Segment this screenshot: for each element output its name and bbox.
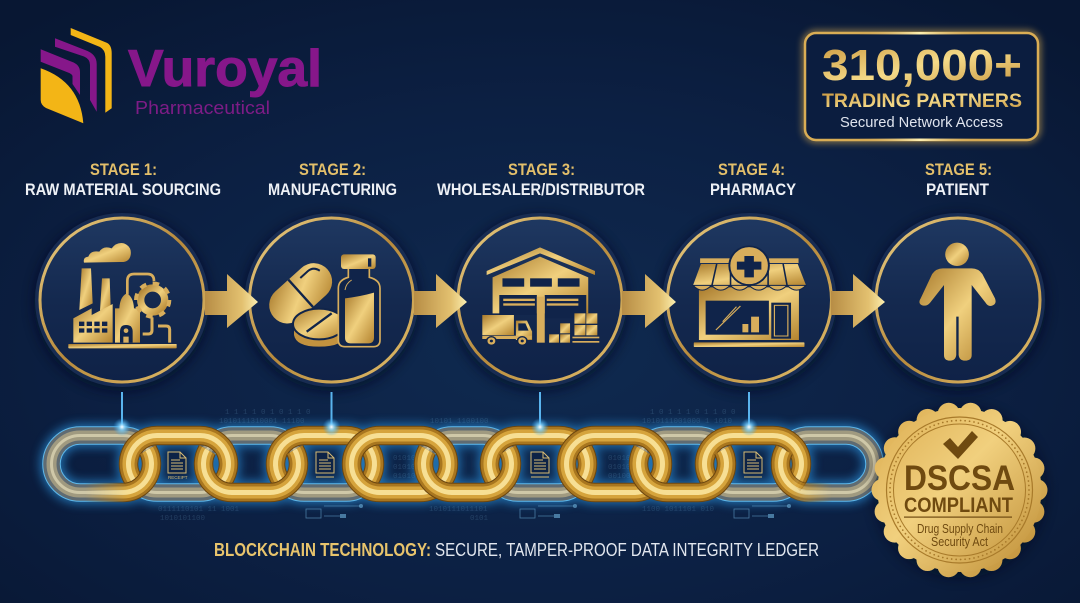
badge text: act name: Drug Supply Chain xyxy=(917,521,1003,536)
arrow: stage 4 to 5 xyxy=(831,274,885,328)
gold links: upper arcs xyxy=(129,436,801,492)
heading: stage 2: MANUFACTURING xyxy=(268,180,397,199)
heading: stage 3: WHOLESALER/DISTRIBUTOR xyxy=(437,180,645,199)
callout: 310,000+ trading partners xyxy=(805,32,1038,141)
arrow: stage 1 to 2 xyxy=(205,274,258,328)
stage 3 circle: warehouse xyxy=(452,213,628,391)
heading: stage 5: PATIENT xyxy=(926,180,990,199)
chain glow xyxy=(52,436,874,492)
document icons: RECEIPT xyxy=(168,475,188,480)
binary data texture: 10101 1100100 xyxy=(430,418,489,426)
binary data texture: 1010111310001 11100 xyxy=(219,418,305,426)
gold fade: last link xyxy=(781,450,832,492)
caption: blockchain technology: BLOCKCHAIN TECHNOLOGY: xyxy=(214,540,431,560)
binary data texture: 010100 xyxy=(608,464,636,472)
icon: logo mark xyxy=(41,28,112,123)
heading: stage 1: STAGE 1: xyxy=(90,160,157,179)
big number: 310,000+ xyxy=(822,41,1022,90)
logo wordmark: Vuroyal xyxy=(128,40,322,98)
icon: person xyxy=(919,243,996,361)
connectors: stage to chain xyxy=(122,392,749,428)
badge: DSCSA compliant seal xyxy=(874,406,1046,578)
gold fade: first link xyxy=(85,450,151,492)
heading: stage 2 xyxy=(268,160,397,199)
heading: stage 4 xyxy=(710,160,797,199)
badge: DSCSA compliant seal: Security Act xyxy=(931,534,988,549)
heading: stage 1 xyxy=(25,160,221,199)
heading: stage 2: STAGE 2: xyxy=(299,160,366,179)
icon: warehouse and truck xyxy=(482,247,599,346)
stage 4 circle: pharmacy xyxy=(662,213,838,391)
binary data texture: 1010111011101 xyxy=(429,506,488,514)
binary data texture: 010100 xyxy=(393,455,421,463)
heading: stage 4: STAGE 4: xyxy=(718,160,785,179)
caption: blockchain technology xyxy=(214,540,819,560)
data key icons xyxy=(306,504,791,518)
stage 5 circle: patient xyxy=(870,213,1046,391)
connector sparks xyxy=(113,418,758,436)
document icons xyxy=(168,452,762,480)
icon: check mark xyxy=(943,431,978,459)
binary data texture xyxy=(158,409,736,523)
binary data texture: 0101 xyxy=(470,515,489,523)
callout subtext: Secured Network Access xyxy=(840,114,1003,131)
binary data texture: 010100 xyxy=(608,455,636,463)
caption: blockchain technology: SECURE, TAMPER-PROOF DATA INTEGRITY LEDGER xyxy=(435,540,819,560)
badge subtitle: COMPLIANT xyxy=(904,494,1013,517)
silver links xyxy=(52,436,874,492)
logo subtitle: Pharmaceutical xyxy=(135,98,270,118)
binary data texture: 010100 xyxy=(393,473,421,481)
binary data texture: 1010111001000 1 1010 xyxy=(642,418,733,426)
binary data texture: 001001 xyxy=(608,473,636,481)
icon: pharmacy shop xyxy=(693,246,806,347)
heading: stage 5 xyxy=(925,160,992,199)
binary data texture: 010100 xyxy=(393,464,421,472)
logo: Vuroyal Pharmaceutical xyxy=(41,28,322,123)
binary data texture: 0111110101 11 1001 xyxy=(158,506,240,514)
stage 1 circle: factory xyxy=(34,213,210,391)
heading: stage 3 xyxy=(437,160,645,199)
blockchain chain xyxy=(52,418,874,518)
arrow: stage 2 to 3 xyxy=(414,274,467,328)
gold links: lower arcs xyxy=(204,450,726,492)
heading: stage 3: STAGE 3: xyxy=(508,160,575,179)
binary data texture: 1100 1011101 010 xyxy=(642,506,715,514)
badge title: DSCSA xyxy=(904,459,1015,498)
heading: stage 1: RAW MATERIAL SOURCING xyxy=(25,180,221,199)
heading: stage 4: PHARMACY xyxy=(710,180,797,199)
icon: factory xyxy=(68,243,177,348)
binary data texture: 1010101100 xyxy=(160,515,206,523)
heading: stage 5: STAGE 5: xyxy=(925,160,992,179)
callout heading: TRADING PARTNERS xyxy=(822,91,1022,112)
binary data texture: 1 1 1 1 0 1 0 1 1 0 xyxy=(225,409,311,417)
arrow: stage 3 to 4 xyxy=(622,274,676,328)
icon: pills and bottle xyxy=(262,254,380,348)
stage 2 circle: pills and bottle xyxy=(244,213,420,391)
binary data texture: 1 0 1 1 1 0 1 1 0 0 xyxy=(650,409,736,417)
